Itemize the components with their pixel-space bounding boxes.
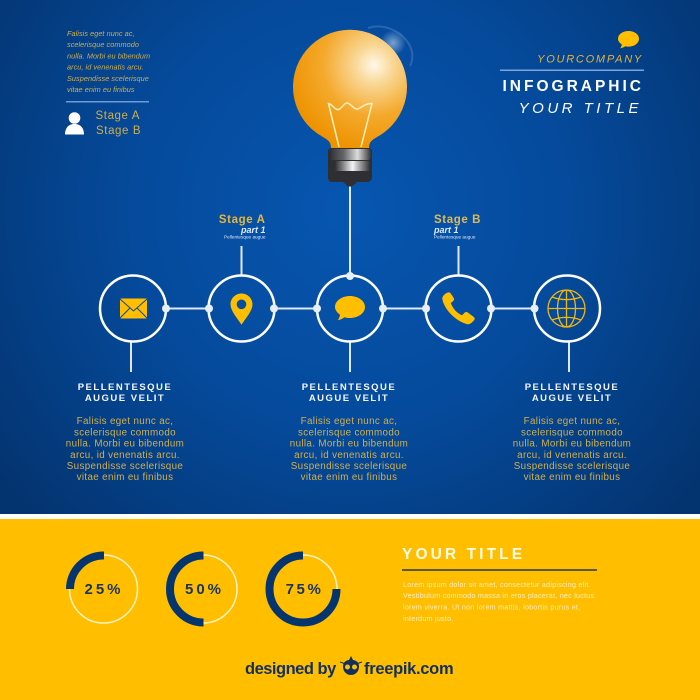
icon: light bulb: [293, 30, 407, 187]
text block: column 1: [66, 382, 184, 483]
text block: column 3: AUGUE VELIT: [532, 393, 612, 404]
text block: column 2: Falisis eget nunc ac,: [301, 416, 397, 427]
text block: intro note: [67, 29, 150, 94]
text block: column 3: arcu, id venenatis arcu.: [517, 450, 627, 461]
text block: column 1: nulla. Morbi eu bibendum: [66, 438, 184, 450]
text block: column 2: [290, 382, 408, 483]
text block: column 2: PELLENTESQUE: [302, 382, 396, 393]
text block: footer paragraph: lorem viverra. Ut non lorem mattis, lobortis purus et,: [403, 604, 580, 612]
company header: YOURCOMPANY: [537, 54, 643, 66]
text block: column 1: arcu, id venenatis arcu.: [70, 450, 180, 461]
icon: phone: [442, 293, 474, 324]
text block: intro note: Suspendisse scelerisque: [67, 74, 149, 83]
text block: footer paragraph: Lorem ipsum dolor sit amet, consectetur adipiscing elit.: [403, 581, 591, 589]
company header: INFOGRAPHIC: [502, 78, 644, 95]
panel: blue background: [0, 0, 700, 514]
icon: freepik mascot: [340, 656, 362, 675]
text block: column 3: nulla. Morbi eu bibendum: [513, 438, 631, 450]
label: Stage A: part 1: [240, 225, 266, 235]
label: Stage B: Stage B: [434, 214, 481, 226]
stage 2: location circle: [205, 276, 278, 342]
credit: designed by freepik: freepik.com: [364, 660, 453, 678]
text block: footer paragraph: interdum justo.: [403, 615, 454, 623]
credit: designed by freepik: designed by: [245, 660, 337, 678]
chart: 75% donut: 75%: [286, 581, 323, 598]
chart: 25% donut: [70, 555, 138, 623]
icon: lamp glow: [368, 26, 412, 66]
text block: column 3: scelerisque commodo: [521, 428, 623, 438]
credit: designed by freepik: [245, 656, 453, 678]
text block: column 3: PELLENTESQUE: [525, 382, 619, 393]
legend: stages: Stage A: [96, 110, 140, 122]
text block: column 2: vitae enim eu finibus: [301, 472, 397, 483]
stage 5: globe circle: [530, 276, 600, 342]
icon: person: [65, 112, 84, 134]
text block: column 1: Suspendisse scelerisque: [67, 461, 183, 472]
chart: 75% donut: [269, 555, 337, 623]
icon: globe: [548, 290, 585, 327]
text block: column 1: Falisis eget nunc ac,: [77, 416, 173, 427]
text block: intro note: scelerisque commodo: [67, 40, 139, 49]
panel: yellow footer: [0, 519, 700, 700]
chart: 50% donut: 50%: [185, 581, 224, 598]
text block: column 2: nulla. Morbi eu bibendum: [290, 438, 408, 450]
heading: your title: YOUR TITLE: [402, 546, 525, 563]
text block: column 3: [513, 382, 631, 483]
text block: column 2: arcu, id venenatis arcu.: [294, 450, 404, 461]
text block: column 2: scelerisque commodo: [298, 428, 400, 438]
label: Stage B: [433, 214, 481, 240]
text block: column 1: vitae enim eu finibus: [77, 472, 173, 483]
icon: speech bubble: [335, 296, 365, 320]
chart: 50% donut: [169, 555, 237, 623]
stage 1: mail circle: [100, 276, 170, 342]
chart: timeline connectors: [131, 246, 569, 372]
stage 4: phone circle: [422, 276, 495, 342]
label: Stage A: [219, 214, 266, 240]
icon: map pin: [230, 294, 252, 325]
text block: column 2: Suspendisse scelerisque: [291, 461, 407, 472]
chart: 25% donut: 25%: [84, 581, 124, 598]
text block: intro note: Falisis eget nunc ac,: [67, 29, 135, 38]
legend: stages: [96, 110, 141, 137]
text block: column 1: PELLENTESQUE: [78, 382, 172, 393]
label: Stage B: Pellentesque augue: [434, 234, 476, 240]
text block: footer paragraph: Vestibulum commodo massa in eros placerat, nec luctus: [403, 592, 595, 600]
text block: column 3: Suspendisse scelerisque: [514, 461, 630, 472]
icon: company bubble: [618, 31, 639, 48]
text block: column 1: AUGUE VELIT: [85, 393, 165, 404]
connector: lamp to centre: [349, 180, 351, 275]
text block: intro note: nulla. Morbi eu bibendum: [67, 52, 150, 60]
icon: envelope: [120, 298, 147, 318]
label: Stage A: Pellentesque augue: [224, 234, 266, 240]
legend: stages: Stage B: [96, 125, 141, 137]
text block: intro note: vitae enim eu finibus: [67, 85, 135, 94]
label: Stage A: Stage A: [219, 214, 266, 226]
label: Stage B: part 1: [433, 225, 459, 235]
text block: intro note: arcu, id venenatis arcu.: [67, 62, 144, 72]
text block: column 3: vitae enim eu finibus: [524, 472, 620, 483]
text block: column 1: scelerisque commodo: [74, 428, 176, 438]
company header: [500, 31, 644, 117]
stage 3: speech circle: [313, 272, 387, 342]
text block: column 2: AUGUE VELIT: [309, 393, 389, 404]
text block: footer paragraph: [403, 581, 595, 623]
text block: column 3: Falisis eget nunc ac,: [524, 416, 620, 427]
company header: YOUR TITLE: [519, 100, 642, 117]
